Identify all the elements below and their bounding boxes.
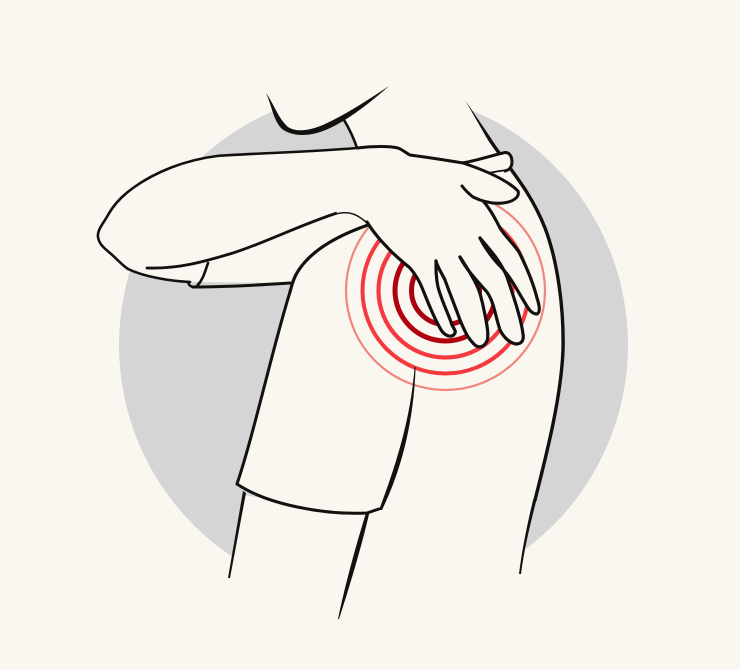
cuff seam (198, 263, 208, 285)
pain rings (346, 191, 545, 390)
lower arm right line (338, 512, 370, 619)
ring: inner dark red (412, 256, 480, 324)
hand left edge and index finger (367, 222, 455, 336)
torso right outline (465, 100, 563, 574)
shirt strap under thumb (462, 153, 512, 175)
armpit curve (290, 225, 368, 292)
ring: second red (362, 208, 528, 374)
cuff knot (188, 282, 199, 287)
forearm lower edge (147, 212, 367, 268)
middle finger (436, 257, 488, 347)
ring: third red (378, 224, 512, 358)
ring: fourth dark red (395, 240, 496, 341)
ring: outer pale (346, 191, 545, 390)
background grey circle (119, 90, 628, 600)
hand (320, 146, 539, 347)
lower arm lines (228, 491, 370, 619)
sleeve right edge (379, 367, 416, 510)
collar line at shoulder (344, 120, 357, 148)
ring finger (460, 238, 523, 344)
body fill: head and neck area (262, 60, 480, 133)
hand top and thumb outline (357, 146, 518, 203)
forearm (98, 148, 370, 292)
little finger (480, 202, 539, 314)
lower arm left line (228, 491, 246, 578)
hand fill (320, 146, 539, 346)
body fill: lower arm (229, 495, 367, 618)
forearm top edge (98, 148, 357, 282)
body fill: chest and torso (300, 87, 563, 640)
cuff bottom edge (193, 283, 290, 287)
neckline (266, 86, 389, 135)
sleeve of the upper arm (237, 225, 415, 513)
